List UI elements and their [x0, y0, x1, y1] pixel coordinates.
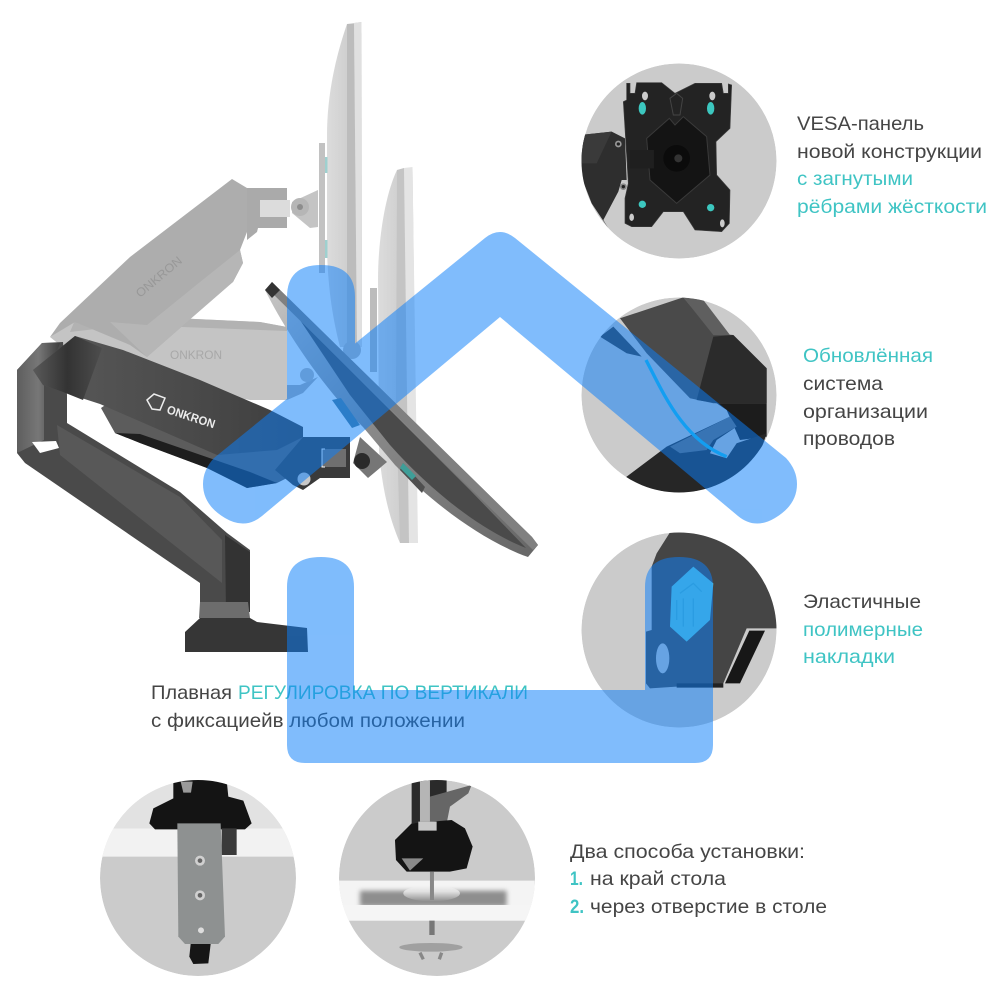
VESA studs — [639, 102, 714, 211]
photo circle: polymer pads — [582, 532, 783, 728]
hole plate — [399, 943, 463, 952]
photo circle: through-desk mount — [339, 780, 535, 976]
logo: ONKRON — [165, 403, 217, 431]
text: cable management: проводов — [803, 428, 895, 450]
text: cable management: система — [803, 373, 883, 395]
text: VESA panel — [797, 113, 987, 218]
text: VESA panel: с загнутыми — [797, 168, 913, 190]
text: polymer pads: полимерные — [803, 619, 923, 641]
VESA tilt hinge — [647, 150, 654, 168]
house roof — [203, 232, 797, 524]
VESA keyholes — [629, 92, 725, 227]
text: cable management — [803, 345, 933, 450]
VESA arm — [580, 132, 627, 228]
ghost arm: raised position — [50, 179, 318, 357]
VESA plate — [623, 83, 732, 232]
text: VESA panel: новой конструкции — [797, 141, 982, 163]
text: two mounting methods: через отверстие в столе — [590, 896, 827, 918]
hole clamp — [395, 820, 473, 872]
ghost monitor: upper — [319, 22, 362, 347]
blue cable — [646, 360, 727, 457]
main arm: column and lower gas spring — [17, 342, 250, 618]
text: cable management: организации — [803, 401, 928, 423]
text: vertical adjustment: РЕГУЛИРОВКА ПО ВЕРТИКАЛИ — [238, 682, 528, 704]
text: two mounting methods: Два способа установки: — [570, 841, 805, 863]
text: polymer pads: Эластичные — [803, 591, 921, 613]
cable arm upper — [620, 297, 767, 403]
text: VESA panel: VESA-панель — [797, 113, 924, 135]
text: vertical adjustment: Плавная — [151, 682, 232, 704]
photo circle: desk edge clamp — [100, 777, 297, 976]
text: two mounting methods: на край стола — [590, 868, 726, 890]
text: polymer pads — [803, 591, 923, 668]
text: vertical adjustment: с фиксациейв любом положении — [151, 710, 465, 732]
blue house overlay — [203, 232, 797, 763]
main arm: upper body with logo — [33, 336, 350, 488]
text: two mounting methods: 1. — [570, 868, 583, 890]
photo circle: VESA panel — [580, 64, 776, 258]
main arm: base clamp — [185, 618, 308, 652]
ghost arm: middle position: ONKRON — [170, 348, 222, 362]
photo circle: cable management — [582, 297, 776, 497]
product: monitor arm with positions — [17, 22, 538, 652]
text: two mounting methods — [570, 841, 827, 918]
text: polymer pads: накладки — [803, 646, 895, 668]
cable arm lower — [626, 417, 767, 492]
ghost monitor: lower — [370, 167, 418, 543]
tilt joint and hinge — [275, 437, 387, 490]
hole post — [412, 780, 447, 823]
edge bracket — [177, 823, 225, 944]
text: two mounting methods: 2. — [570, 896, 584, 918]
hole desk — [339, 880, 534, 905]
edge clamp head — [149, 780, 252, 829]
logo — [147, 394, 217, 431]
tilted dark monitor — [265, 282, 538, 557]
ghost arm: middle position — [50, 316, 361, 400]
VESA hub — [647, 117, 710, 203]
edge desk — [114, 783, 282, 828]
pad hole — [656, 643, 669, 673]
hole bolt — [430, 872, 434, 900]
pads body — [646, 532, 783, 688]
house walls and floor — [287, 557, 713, 763]
ghost arm: raised position: ONKRON — [133, 254, 185, 300]
text: cable management: Обновлённая — [803, 345, 933, 367]
text: VESA panel: рёбрами жёсткости — [797, 196, 987, 218]
VESA logo mark — [670, 93, 683, 115]
text: vertical adjustment — [151, 682, 528, 732]
house chimney stub — [287, 265, 355, 399]
pad hexagon — [670, 567, 713, 642]
